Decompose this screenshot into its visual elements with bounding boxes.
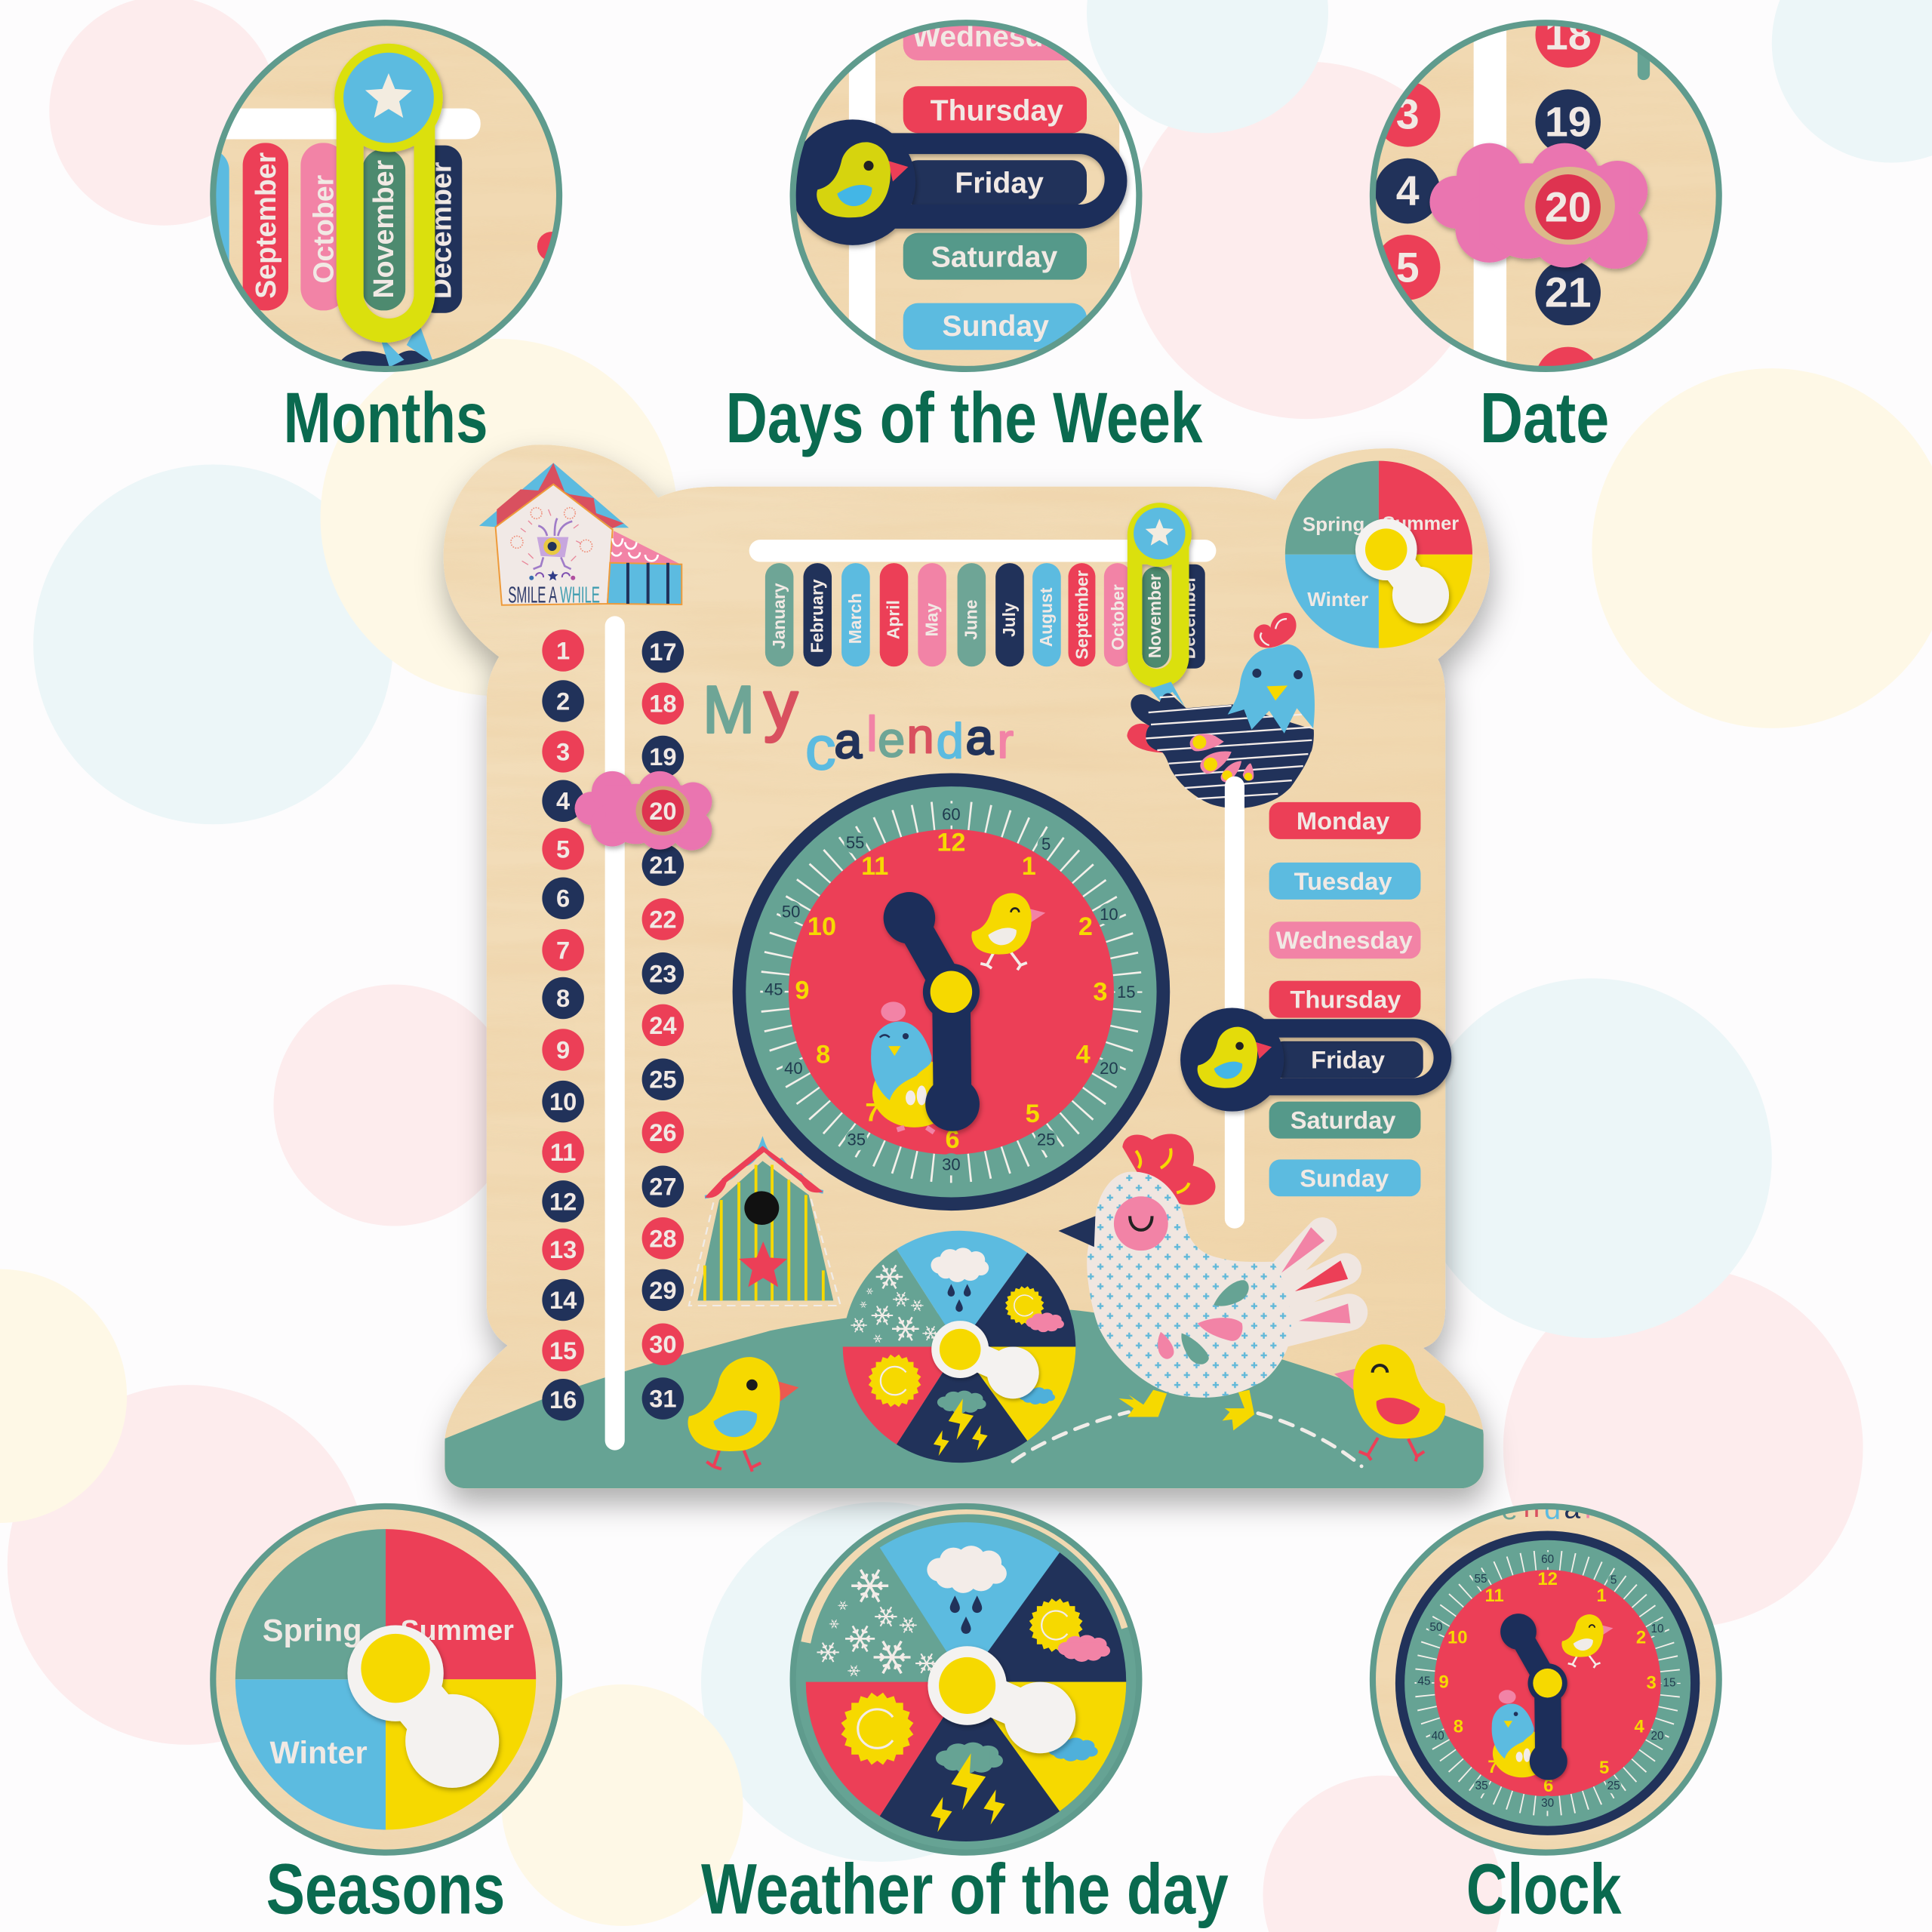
hour numbers: 6 [946,1125,960,1154]
minute labels: 40 [784,1059,803,1078]
panel: date close-up [1369,20,1722,372]
date numbers: 3 [1396,91,1420,137]
minute labels: 60 [942,805,961,824]
panel: clock close-up: d [1544,1494,1561,1526]
minute labels [763,803,1137,1176]
date numbers column 1 to 16: 10 [549,1088,577,1115]
icon: slider bird [1198,1027,1272,1088]
hour numbers: 6 [1543,1776,1553,1796]
minute labels: 30 [942,1155,961,1174]
day strips: Thursday [1290,986,1401,1014]
title: My calendar: e [878,712,905,767]
yellow month slider [1128,503,1192,688]
date numbers: 5 [1396,244,1420,291]
blue hen on clock face [871,1001,956,1132]
date numbers column 1 to 16: 14 [549,1286,577,1314]
panel: weather close-up [783,1497,1152,1866]
date numbers column 1 to 16: 6 [556,884,570,912]
seasons wheel: Spring [1303,513,1364,536]
hour numbers: 3 [1093,977,1107,1006]
minute labels [1417,1552,1677,1811]
day strips: Tuesday [1294,867,1392,895]
title: My calendar: l [866,706,878,761]
blue hen on clock face [1492,1690,1551,1777]
title: My calendar: M [703,672,755,747]
date numbers column 17 to 31: 17 [649,638,677,666]
minute labels: 60 [1541,1553,1554,1566]
date numbers column 17 to 31: 19 [649,743,677,771]
date numbers column 1 to 16 [542,629,584,1420]
dashed chick path [1013,1412,1361,1466]
month strips: May [921,603,941,636]
minute labels: 50 [1429,1621,1442,1634]
heading: Days of the Week: Days of the Week [726,378,1203,458]
panel: months close-up [210,20,563,372]
month strips: January [769,583,789,649]
birdhouse [689,1142,841,1306]
date numbers: 21 [1545,269,1592,316]
title: My calendar [703,668,1014,783]
hour numbers [1438,1569,1657,1796]
date numbers column 17 to 31: 25 [649,1066,677,1094]
yellow chick on clock face [1561,1614,1613,1668]
logo house: Smile a While [479,463,681,608]
panel: clock close-up: a [1564,1492,1580,1524]
hour numbers: 9 [1438,1672,1449,1693]
minute labels: 30 [1541,1797,1554,1810]
month strips: October [308,174,340,284]
hour numbers: 8 [1454,1717,1463,1737]
date numbers column 1 to 16: 15 [549,1337,577,1364]
minute labels: 45 [764,980,783,999]
date numbers column 1 to 16: 12 [549,1187,577,1215]
day strips: Saturday [1291,1106,1395,1134]
date numbers column 17 to 31: 23 [649,959,677,987]
day slot [1225,777,1244,1229]
minute labels: 55 [1474,1573,1487,1586]
hour numbers: 9 [795,977,809,1005]
heading: Months: Months [284,378,488,458]
minute labels: 25 [1037,1131,1055,1149]
month strips: March [845,593,865,644]
green ground hill [438,1310,1497,1497]
month strips: November [368,159,399,298]
seasons pointer knob [347,1625,499,1788]
clock hands [884,892,980,1131]
minute labels: 45 [1417,1675,1431,1687]
hour numbers: 1 [1022,852,1036,881]
hour numbers: 7 [1487,1757,1498,1777]
minute labels: 40 [1432,1730,1444,1743]
title: My calendar: d [937,713,964,768]
date numbers column 17 to 31: 28 [649,1224,677,1252]
navy day slider with Friday: Friday [1311,1046,1385,1074]
month strips: December [1180,576,1199,659]
month strips: November [1145,574,1164,658]
hen head [1228,645,1315,734]
day strips: Monday [1297,807,1389,835]
panel: clock close-up: e [1501,1494,1518,1526]
minute labels: 35 [1475,1780,1488,1792]
hour numbers: 12 [937,829,965,857]
date numbers column 1 to 16: 2 [556,687,570,715]
month strips: June [961,600,981,640]
hour numbers [795,829,1107,1154]
minute labels: 5 [1041,835,1051,854]
date numbers: 4 [1396,168,1420,214]
panel: seasons close-up [203,1497,573,1866]
yellow chick right [1334,1344,1445,1461]
hour numbers: 5 [1026,1100,1040,1128]
hour numbers: 2 [1636,1627,1646,1647]
hour numbers: 11 [1485,1586,1504,1606]
panel: clock close-up [1361,1491,1731,1866]
pink cloud slider [1429,143,1647,269]
heading: Weather of the day: Weather of the day [701,1850,1229,1930]
date numbers column 1 to 16: 13 [549,1235,577,1263]
panel: seasons close-up: Summer [401,1614,514,1646]
hour numbers: 7 [865,1098,879,1127]
date numbers column 1 to 16: 8 [556,984,570,1012]
weather wheel [843,1231,1075,1463]
day strips: Wednesday [1276,926,1413,954]
date numbers column 1 to 16: 1 [556,637,570,665]
date numbers: 18 [1545,11,1592,58]
date numbers column 1 to 16: 11 [550,1138,576,1166]
date numbers column 17 to 31: 27 [649,1173,677,1201]
date numbers column 1 to 16: 4 [556,787,570,815]
minute labels: 20 [1100,1059,1118,1078]
month slot [226,109,481,139]
hour numbers: 10 [1447,1627,1468,1647]
date numbers column 1 to 16: 7 [556,936,570,964]
date numbers column 1 to 16: 5 [556,835,570,863]
red wattle [1127,724,1164,752]
date numbers column 17 to 31: 18 [649,690,677,718]
date numbers column 17 to 31: 30 [649,1331,677,1358]
day strips: Sunday [1300,1164,1389,1192]
panel: clock close-up: r [1585,1492,1595,1524]
date numbers column 17 to 31: 21 [649,851,677,879]
hen wing feathers [1190,734,1254,783]
date numbers column 1 to 16: 9 [556,1036,570,1064]
title: My calendar: n [906,709,934,764]
panel: clock close-up: n [1523,1491,1540,1524]
hour numbers: 11 [861,852,888,881]
minute labels: 15 [1663,1677,1676,1690]
minute labels: 35 [847,1131,866,1149]
seasons wheel: Summer [1383,513,1459,534]
month strips: September [250,152,281,299]
title: My calendar: a [966,709,994,764]
date numbers column 17 to 31: 29 [649,1276,677,1304]
month strips: April [884,600,903,639]
navy day slider [790,119,1127,245]
title: My calendar: r [997,713,1014,768]
hour numbers: 3 [1646,1673,1657,1694]
date numbers column 17 to 31: 26 [649,1118,677,1146]
minute labels: 25 [1607,1780,1620,1792]
title: My calendar: a [835,713,863,768]
day strips: Saturday [931,242,1058,274]
month strips [216,143,462,313]
hour numbers: 10 [808,912,836,941]
wooden calendar board [431,431,1503,1503]
day strips: Sunday [942,310,1049,343]
minute labels: 50 [782,903,800,921]
month slot [749,540,1216,561]
month strips: February [807,579,826,653]
title: My calendar: y [764,668,798,743]
logo house: Smile a While: SMILE A WHILE [508,582,600,608]
hour numbers: 5 [1599,1758,1609,1778]
month strips: July [999,602,1019,637]
striped blue hen [1127,613,1315,808]
title: My calendar: c [805,714,836,783]
month strips: September [1072,571,1091,660]
panel: seasons close-up: Spring [263,1613,362,1648]
hen peek at bottom [341,350,429,366]
yellow chick on clock face [971,893,1045,970]
hour numbers: 4 [1635,1717,1645,1737]
clock hands [1500,1614,1567,1780]
day strips [1269,802,1420,1196]
minute labels: 10 [1100,905,1118,924]
hour numbers: 1 [1597,1586,1607,1606]
heading: Date: Date [1480,378,1609,458]
month strips: August [1036,587,1056,647]
hen comb [1254,613,1297,648]
panel: seasons close-up: Winter [270,1734,368,1770]
month strips: October [1108,584,1128,651]
tail wedge [1149,681,1185,707]
pink cloud date slider: 20 [649,797,677,825]
white spotted hen [1058,1134,1350,1431]
date numbers column 17 to 31: 24 [649,1011,677,1039]
pink cloud date slider [575,771,712,851]
seasons wheel: Winter [1307,588,1368,611]
panel: date close-up: 20 [1545,183,1592,230]
day strips: Thursday [931,94,1063,127]
date numbers column 17 to 31: 31 [649,1385,677,1413]
day strips: Wednesday [912,20,1076,53]
date numbers [1376,26,1601,366]
yellow chick left [688,1357,798,1472]
hour numbers: 8 [816,1041,830,1069]
month strips: December [425,162,457,299]
minute labels: 20 [1651,1730,1664,1743]
hour numbers: 12 [1537,1569,1558,1589]
date numbers: 19 [1545,99,1592,146]
month strips [765,563,1205,669]
navy day slider with Friday [1180,1008,1451,1112]
heading: Seasons: Seasons [266,1850,505,1930]
heading: Clock: Clock [1466,1850,1622,1930]
seasons wheel [1285,461,1472,648]
panel: days of the week close-up [789,20,1143,372]
minute labels: 5 [1611,1574,1617,1586]
yellow month slider [334,44,443,343]
date slot [605,616,625,1451]
date numbers column 1 to 16: 16 [549,1386,577,1414]
date numbers column 17 to 31 [642,631,684,1420]
icon: slider bird [817,142,908,217]
date numbers column 17 to 31: 22 [649,905,677,933]
date numbers column 1 to 16: 3 [556,737,570,765]
minute labels: 10 [1651,1623,1664,1635]
hour numbers: 2 [1078,912,1093,941]
day strips [903,2,1087,350]
seasons pointer knob [1355,518,1449,623]
minute labels: 55 [846,833,864,852]
hour numbers: 4 [1076,1041,1091,1069]
minute labels: 15 [1117,983,1136,1001]
analog clock [733,773,1170,1211]
navy body [1131,693,1314,808]
panel: days of the week close-up: Friday [955,168,1044,200]
